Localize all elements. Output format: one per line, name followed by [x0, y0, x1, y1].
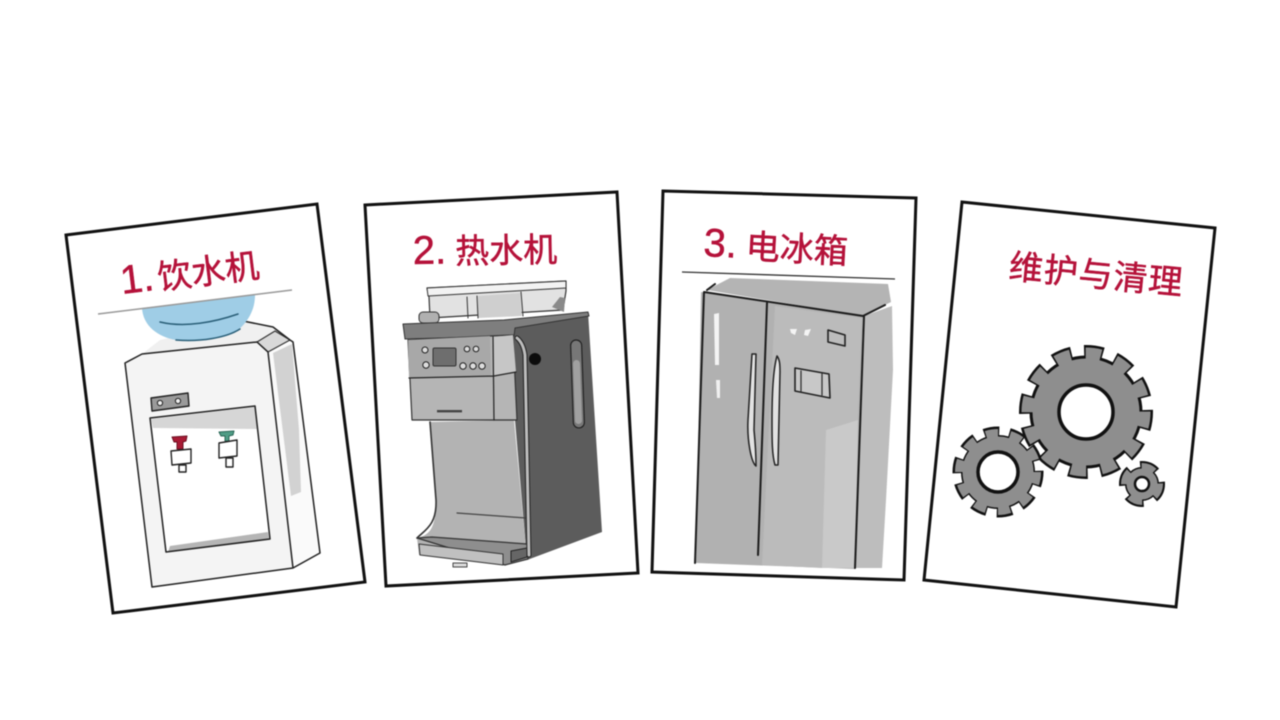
icon: hot water tap	[171, 436, 191, 472]
icon: control buttons	[422, 346, 485, 369]
icon: fridge display	[828, 330, 845, 346]
heading: maintenance and cleaning: 维护与清理	[1007, 248, 1185, 303]
divider line: card 3	[682, 272, 895, 279]
icon: tiny gear	[1124, 466, 1160, 502]
icon: hot water machine	[403, 281, 602, 567]
panel: water dispenser card	[66, 204, 365, 613]
icon: fridge handles	[748, 354, 780, 466]
icon: power knob	[529, 353, 541, 365]
icon: display screen	[433, 348, 456, 366]
icon: small gear	[959, 433, 1037, 511]
icon: water dispenser panel	[795, 368, 830, 398]
panel: maintenance card	[924, 202, 1215, 607]
divider line: card 1	[98, 290, 292, 314]
panel: refrigerator card	[652, 191, 916, 580]
heading: water dispenser: 1.饮水机	[118, 242, 261, 303]
icon: large gear	[1026, 352, 1146, 472]
icon: control box	[151, 393, 189, 411]
icon: refrigerator	[695, 278, 893, 569]
icon: water level gauge	[570, 340, 585, 428]
icon: water dispenser	[125, 295, 320, 587]
icon: water bottle	[142, 295, 255, 341]
heading: refrigerator: 3.电冰箱	[703, 221, 849, 273]
icon: cold water tap	[219, 431, 237, 467]
panel: hot water machine card	[365, 192, 638, 586]
heading: hot water machine: 2.热水机	[412, 226, 557, 273]
